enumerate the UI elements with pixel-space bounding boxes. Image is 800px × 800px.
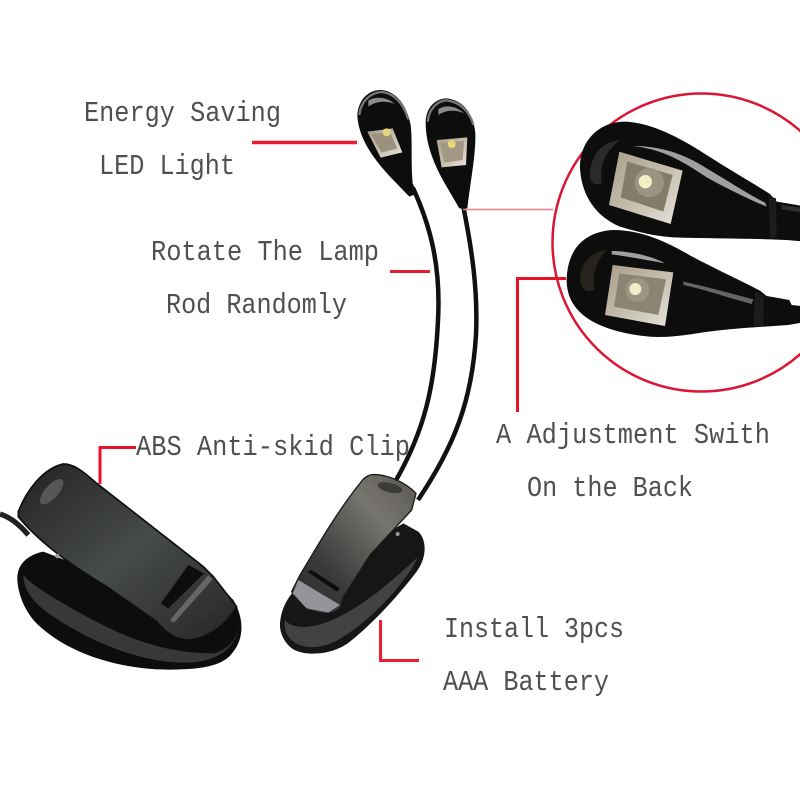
left clip base (17, 552, 241, 670)
centre clip, front view (280, 475, 425, 654)
leader: energy saving LED (252, 141, 357, 144)
label: Energy Saving LED Light: Energy Saving (84, 97, 281, 130)
label: A Adjustment Swith On the Back: A Adjustment Swith (496, 419, 770, 452)
label: Rotate The Lamp Rod Randomly: Rotate The Lamp (151, 236, 379, 269)
left clip pin (55, 554, 60, 558)
centre clip slot (307, 570, 340, 592)
enlarged lower lamp head (567, 230, 800, 337)
left clip thumb recess (36, 475, 67, 508)
enlarged upper lamp head (580, 122, 800, 242)
small right lamp head (426, 98, 475, 208)
enlarged lamp heads (567, 122, 800, 337)
label: A Adjustment Swith On the Back: On the Back (527, 472, 693, 505)
zoom circle (552, 94, 800, 392)
label: A Adjustment Swith On the Back (496, 419, 770, 505)
centre clip base (280, 523, 425, 654)
left clip slot (161, 565, 204, 608)
label: Energy Saving LED Light: LED Light (99, 150, 235, 183)
centre clip lever (292, 475, 416, 613)
label: Install 3pcs AAA Battery (443, 613, 624, 699)
label: Rotate The Lamp Rod Randomly: Rod Randomly (166, 289, 347, 322)
small left lamp head (357, 90, 417, 197)
upper LED window (609, 152, 683, 224)
right flexible rod (418, 205, 476, 500)
left clip cord (0, 514, 28, 535)
small lamp heads (357, 90, 475, 208)
leader: adjustment switch (518, 278, 566, 412)
label: Rotate The Lamp Rod Randomly (151, 236, 379, 322)
leader: rotate the lamp rod (390, 270, 430, 273)
leader: ABS clip (100, 448, 136, 484)
left clip, side view (0, 464, 241, 670)
small right LED window (437, 137, 467, 167)
label: ABS Anti-skid Clip: ABS Anti-skid Clip (136, 431, 410, 464)
label: Install 3pcs AAA Battery: AAA Battery (443, 666, 609, 699)
small left LED window (367, 128, 402, 158)
label: Install 3pcs AAA Battery: Install 3pcs (444, 613, 624, 646)
label: Energy Saving LED Light (84, 97, 281, 183)
left clip lever (18, 464, 237, 640)
centre clip thumb recess (377, 480, 403, 495)
centre clip pin (396, 532, 400, 536)
left flexible rod (395, 188, 438, 482)
leader: battery (380, 620, 419, 660)
lower LED window (605, 265, 673, 326)
leader: to zoom circle (463, 208, 553, 210)
